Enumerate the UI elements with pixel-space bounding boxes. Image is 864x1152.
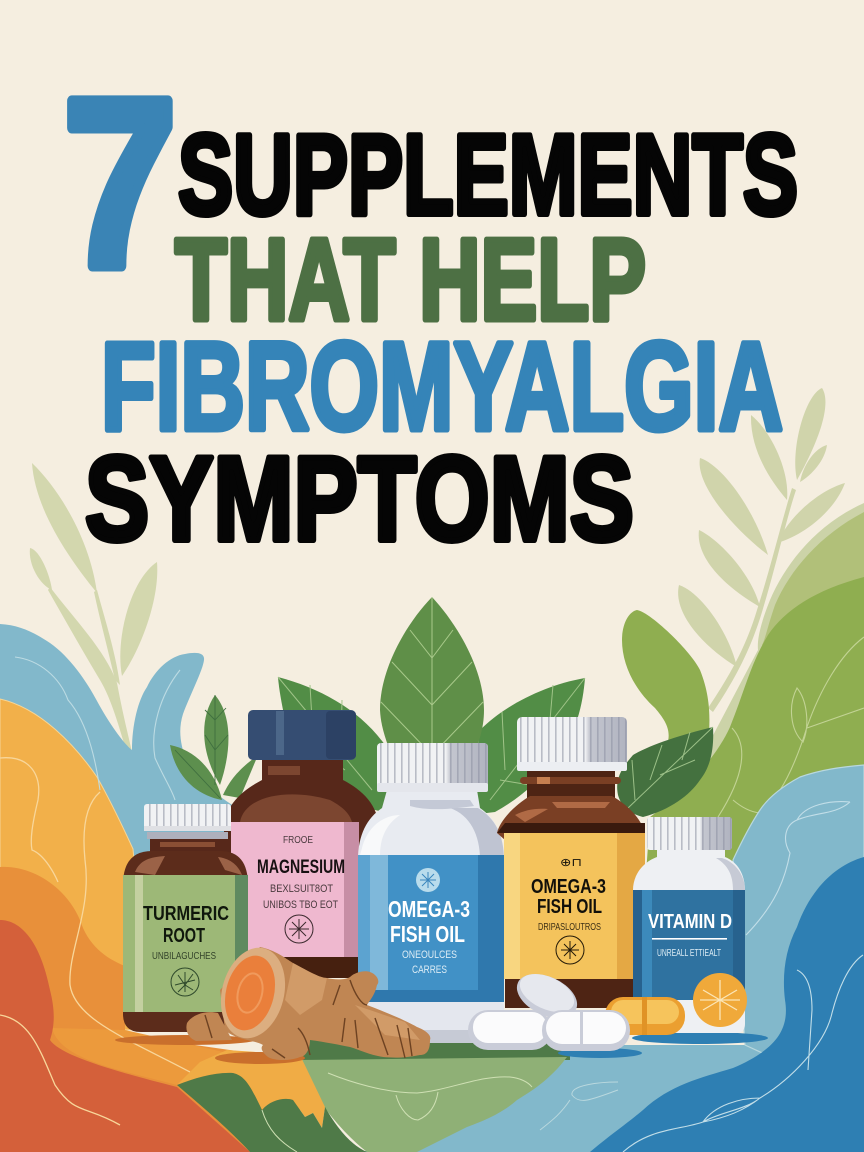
- root cut face rim: [212, 941, 294, 1045]
- vitamin d body: [633, 850, 745, 1033]
- magnesium body: [224, 760, 379, 978]
- vitamin d label text: UNREALL ETTIEALT: [657, 947, 721, 959]
- amber label text: DRIPASLOUTROS: [538, 921, 601, 933]
- magnesium cap: [248, 710, 356, 760]
- white bottle cap: [377, 743, 488, 791]
- title line: symptoms: SYMPTOMS: [85, 432, 634, 566]
- vitamin d label: [633, 890, 745, 1000]
- vitamin d cap: [647, 817, 732, 850]
- floor shadows: [115, 1032, 768, 1064]
- pale botanical sprig right: [678, 388, 845, 712]
- light green ground: [298, 1057, 567, 1152]
- dark green ground: [177, 1073, 367, 1152]
- root cut face: [218, 950, 282, 1036]
- ground contour lines: [262, 1073, 532, 1152]
- main hill: [640, 577, 864, 960]
- turmeric label text: TURMERIC: [143, 903, 229, 925]
- blue wave: [0, 624, 240, 1000]
- teal ground contour lines: [540, 1082, 618, 1130]
- pills: [468, 965, 630, 1051]
- amber body: [497, 796, 645, 1008]
- big center leaf: [380, 597, 484, 765]
- bottle: omega-3 fish oil amber: [497, 717, 645, 1008]
- wave floor patch: [52, 1028, 228, 1085]
- title: [63, 49, 798, 566]
- small sprig leaves: [204, 695, 228, 785]
- central leaves: [170, 597, 713, 817]
- left waves: [0, 624, 300, 1152]
- dark green floor strip: [298, 1040, 570, 1060]
- vitamin d label text: VITAMIN D: [648, 911, 732, 933]
- teal ground: [360, 1045, 864, 1152]
- dark right leaf: [617, 727, 713, 817]
- turmeric label text: UNBILAGUCHES: [152, 950, 216, 962]
- amber label text: OMEGA-3: [531, 876, 606, 898]
- turmeric root: [186, 941, 430, 1060]
- amber label text: ⊕⊓: [560, 857, 582, 869]
- left green leaf: [278, 677, 395, 815]
- red wave: [0, 920, 250, 1152]
- orange citrus slice: [693, 973, 747, 1027]
- yellow ground patch: [177, 1050, 325, 1128]
- magnesium label text: BEXLSUIT8OT: [270, 883, 333, 895]
- ground: [177, 765, 864, 1152]
- round tablet: [510, 965, 584, 1027]
- title numeral 7: 7: [63, 49, 177, 317]
- vitamin d label text: [648, 911, 732, 959]
- white bottle label text: OMEGA-3: [388, 896, 470, 922]
- yellow wave: [0, 699, 150, 1030]
- magnesium label text: UNIBOS TBO EOT: [263, 899, 338, 911]
- white bottle label text: FISH OIL: [390, 921, 465, 947]
- turmeric cap: [144, 804, 231, 830]
- bottle: omega-3 fish oil white: [358, 743, 504, 1043]
- root left finger: [186, 1012, 232, 1041]
- softgel capsule: [605, 997, 685, 1035]
- pale botanical sprig left: [30, 463, 157, 760]
- amber label text: FISH OIL: [537, 896, 602, 918]
- white bottle label text: ONEOULCES: [402, 949, 457, 961]
- white capsule left: [468, 1010, 552, 1050]
- magnesium label text: FROOE: [283, 834, 313, 846]
- white capsule right: [542, 1010, 630, 1051]
- root main body: [220, 947, 430, 1060]
- right teal wave: [733, 765, 864, 1100]
- right blue wave: [590, 857, 864, 1152]
- bottle: magnesium: [224, 710, 379, 978]
- amber label text: [531, 857, 606, 933]
- mid-green leaf behind right bottles: [622, 610, 709, 745]
- amber neck: [527, 771, 615, 801]
- blue wave contour lines: [15, 657, 180, 800]
- white bottle icon: [416, 868, 440, 892]
- right green hills: [640, 503, 864, 960]
- amber icon: [556, 936, 584, 964]
- magnesium label text: MAGNESIUM: [257, 857, 345, 878]
- turmeric icon: [171, 968, 199, 996]
- orange wave: [0, 867, 300, 1152]
- right green leaf: [470, 678, 585, 815]
- turmeric body: [123, 851, 248, 1032]
- white bottle label: [358, 855, 504, 1002]
- magnesium label text: [257, 834, 345, 911]
- turmeric neck: [150, 839, 225, 853]
- white bottle label text: [388, 896, 470, 976]
- title line: that help: THAT HELP: [175, 214, 646, 344]
- light hill: [690, 503, 864, 900]
- white bottle label text: CARRES: [412, 964, 447, 976]
- turmeric label text: ROOT: [163, 925, 205, 947]
- wave contour lines: [0, 758, 190, 1125]
- white bottle body: [358, 790, 504, 1043]
- bottle: turmeric root: [123, 804, 248, 1032]
- root creases: [205, 980, 412, 1058]
- magnesium label: [231, 822, 359, 957]
- amber label: [504, 833, 645, 979]
- turmeric label text: [143, 903, 229, 962]
- amber cap: [517, 717, 627, 771]
- right contour lines: [623, 802, 863, 1152]
- magnesium icon: [285, 915, 313, 943]
- hill vein lines: [718, 637, 864, 817]
- bottle: vitamin d: [633, 817, 745, 1033]
- turmeric label: [123, 875, 248, 1012]
